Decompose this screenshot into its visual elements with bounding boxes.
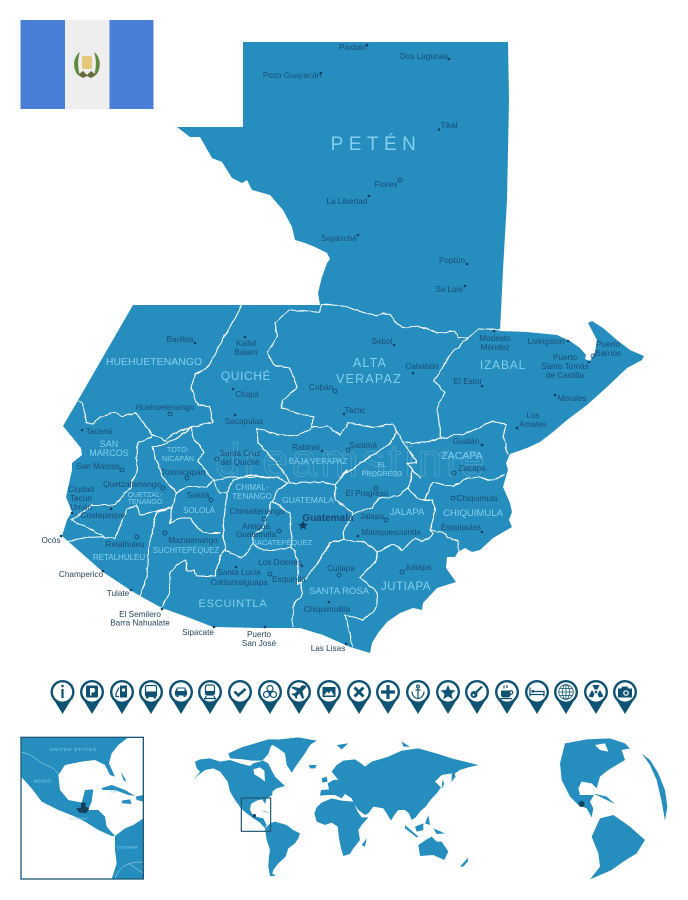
pin: fuel	[110, 680, 134, 714]
inset land: North and Central America	[21, 737, 128, 836]
town labels: Los Dolores	[258, 558, 302, 567]
pin: anchor	[406, 680, 430, 714]
world: South America	[265, 822, 300, 876]
department labels: ALTA	[353, 356, 387, 370]
town labels: La Libertad	[327, 197, 368, 206]
town labels: Coatepeque	[81, 511, 126, 520]
town labels: Umán	[70, 503, 92, 512]
globe	[560, 738, 667, 879]
globe: Cuba	[593, 793, 615, 804]
inset: Guatemala highlight	[76, 803, 89, 813]
town markers	[60, 44, 595, 645]
world: Arctic Canada	[228, 739, 279, 761]
department labels: ZACAPA	[441, 450, 483, 462]
town labels: Retalhuleu	[105, 540, 145, 549]
pin: plus	[376, 680, 400, 714]
town labels: Ciudad	[68, 485, 94, 494]
town labels: Chajul	[235, 390, 259, 399]
town labels: Salamá	[349, 441, 377, 450]
pin: airplane	[287, 680, 311, 714]
coastal town labels: Ocós	[41, 536, 61, 545]
coastal town labels: Las Lisas	[311, 644, 345, 653]
pin: bus	[139, 680, 163, 714]
town labels: Sebol	[372, 337, 393, 346]
pin: car	[169, 680, 193, 714]
department borders	[68, 304, 508, 647]
world: Australia	[418, 837, 448, 860]
department labels: JALAPA	[390, 507, 425, 518]
globe: Guatemala highlight	[579, 801, 585, 807]
coastal town labels: Sipacate	[182, 628, 214, 637]
coastal town labels	[41, 536, 345, 653]
town labels: Dos Lagunas	[400, 52, 448, 61]
town labels: Flores	[375, 180, 397, 189]
world map	[193, 737, 478, 876]
department labels: JUTIAPA	[381, 581, 431, 593]
coastal town labels: Champerico	[59, 570, 104, 579]
town labels: Poptún	[439, 256, 465, 265]
town labels: Barrios	[595, 349, 621, 358]
world: locator box	[241, 798, 271, 831]
department labels: IZABAL	[480, 358, 526, 372]
town labels: Cotzumalguapa	[210, 578, 268, 587]
town labels: Balam	[234, 348, 258, 357]
department labels: VERAPAZ	[336, 372, 402, 386]
town labels: Santo Tomás	[541, 362, 589, 371]
department labels: NICAPÁN	[162, 454, 194, 463]
department labels: QUICHÉ	[221, 368, 271, 383]
town labels: Paxbán	[339, 43, 367, 52]
town labels: del Quiché	[220, 458, 260, 467]
watermark: dreamstime	[215, 434, 485, 486]
department labels: SAN	[100, 439, 118, 449]
inset regional map	[21, 737, 143, 879]
pin: cross mark	[347, 680, 371, 714]
world: Eurasia	[320, 748, 478, 821]
department labels: SUCHITEPÉQUEZ	[153, 546, 219, 555]
coastal town labels: Tulate	[107, 589, 130, 598]
town labels: Mazatenango	[168, 536, 218, 545]
department labels: PETÉN	[331, 134, 421, 155]
town labels: Livingston	[528, 337, 565, 346]
town labels: Barillas	[167, 335, 193, 344]
town labels: Sa Luis	[435, 285, 463, 294]
pin: key	[465, 680, 489, 714]
town labels: Santa Cruz	[220, 449, 260, 458]
department labels: SOLOLÁ	[183, 506, 216, 515]
coastal town labels: San José	[242, 639, 277, 648]
town labels: Esquintla	[272, 575, 306, 584]
department labels: TENANGO	[128, 499, 163, 506]
town labels: Tikal	[441, 121, 458, 130]
department labels: TENANGO	[232, 492, 272, 501]
town labels: Sacapulas	[225, 417, 263, 426]
coastal town labels: El Semilero	[119, 610, 161, 619]
town labels: Santa Lucia	[217, 568, 261, 577]
town labels: Guatemala	[236, 530, 276, 539]
town labels: Cobán	[309, 383, 334, 392]
town labels: Cahabón	[405, 362, 439, 371]
town labels: Sololá	[187, 491, 210, 500]
town labels: de Castilla	[546, 371, 585, 380]
town labels: Modesto	[479, 334, 511, 343]
town labels: Totonicapán	[161, 468, 206, 477]
town labels: Kaibil	[236, 339, 256, 348]
town labels: Jutiapa	[405, 563, 432, 572]
town labels	[68, 43, 621, 614]
department labels: PROGRESO	[362, 471, 403, 478]
pin: parking	[80, 680, 104, 714]
pin: globe	[554, 680, 578, 714]
globe: North America	[560, 738, 630, 817]
department labels: CHIQUIMULA	[443, 508, 503, 519]
globe: Africa limb	[642, 753, 667, 821]
inset regional map: MEXICO	[34, 778, 52, 783]
department labels: ESCUINTLA	[199, 598, 267, 610]
town labels: Guatemala	[302, 513, 354, 524]
coastal town labels: Puerto	[247, 630, 272, 639]
world: Greenland	[270, 737, 317, 773]
coastal town labels: Barra Nahualate	[110, 618, 170, 628]
department labels: RETALHULEU	[93, 553, 145, 562]
town labels: Méndez	[480, 343, 510, 352]
town labels: Sayaxché	[321, 234, 357, 243]
main map: Guatemala country shape	[62, 42, 644, 653]
inset regional map: COLOMBIA	[117, 845, 138, 850]
town labels: Esquipulas	[441, 523, 481, 532]
pin: train	[198, 680, 222, 714]
department labels: QUETZAL-	[128, 492, 163, 499]
pin: check mark	[228, 680, 252, 714]
department labels: GUATEMALA	[282, 495, 334, 505]
inset regional map: GUATEMALA	[69, 816, 87, 820]
town labels: Rabinal	[292, 443, 320, 452]
world: North America	[193, 758, 285, 828]
town labels: Pozo Guayacán	[263, 71, 322, 80]
town labels: Puerto	[553, 353, 578, 362]
town labels: Amates	[519, 420, 547, 429]
inset land: South America	[112, 818, 143, 879]
row of map pin icons	[50, 680, 637, 714]
world: islands	[260, 742, 468, 867]
town labels: Gualán	[453, 437, 480, 446]
pin: coffee cup	[495, 680, 519, 714]
town labels: El Estor	[454, 377, 483, 386]
town labels: San Marcos	[76, 462, 120, 471]
flag of Guatemala	[20, 20, 154, 109]
globe: South America	[590, 815, 645, 879]
department labels: TOTO-	[167, 445, 190, 454]
town labels: Huehuetenango	[136, 403, 195, 412]
department labels: HUEHUETENANGO	[106, 356, 202, 368]
town labels: Antigua	[242, 522, 270, 531]
town labels: Chiquimula	[457, 494, 498, 503]
town labels: Cuilapa	[327, 564, 355, 573]
town labels: Morales	[557, 394, 587, 403]
world: Africa	[314, 798, 368, 856]
pin: bed	[525, 680, 549, 714]
pin: biohazard	[258, 680, 282, 714]
pin: camera	[613, 680, 637, 714]
department labels: BAJA VERAPAZ	[289, 457, 347, 466]
town labels: Puerto	[596, 340, 621, 349]
town labels: Tactic	[345, 406, 365, 415]
town labels: Tecún	[70, 494, 92, 503]
town labels: Tacaná	[86, 427, 113, 436]
town labels: Zacapa	[458, 464, 486, 473]
inset land: Caribbean islands	[101, 772, 143, 804]
town labels: Chiquimulilla	[304, 605, 351, 614]
department labels: SACATEPÉQUEZ	[252, 538, 313, 547]
town labels: Chimaltenango	[229, 507, 285, 516]
pin: picture	[317, 680, 341, 714]
pin: information	[50, 680, 74, 714]
pin: radiation	[584, 680, 608, 714]
department labels: CHIMAL-	[236, 483, 269, 492]
pin: star	[436, 680, 460, 714]
inset regional map: UNITED STATES	[50, 747, 97, 753]
town labels: El Progreso	[346, 489, 389, 498]
town labels: Los	[526, 411, 540, 420]
department labels	[89, 134, 526, 610]
department labels: SANTA ROSA	[309, 586, 370, 597]
inset regional map: CUBA	[109, 789, 119, 793]
world: Guatemala highlight	[253, 814, 256, 817]
town labels: Jalapa	[360, 512, 385, 521]
department labels: MARCOS	[89, 448, 129, 458]
town labels: Quetzaltenango	[103, 480, 161, 489]
department labels: EL	[378, 462, 386, 469]
town labels: Mataquescuintla	[361, 528, 421, 537]
